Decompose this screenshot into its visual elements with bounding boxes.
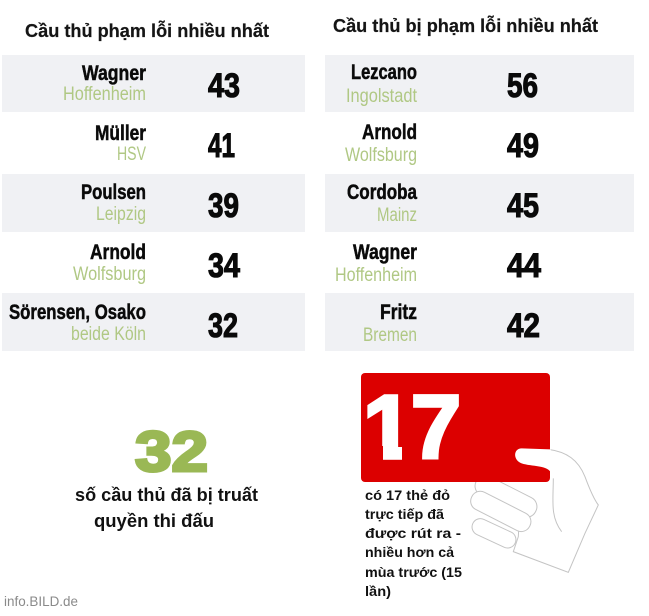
source credit: info.BILD.de bbox=[4, 593, 78, 609]
row: Wagner 43 bbox=[2, 55, 305, 112]
caption: suspended players bbox=[75, 485, 258, 531]
icon: hand holding red card bbox=[361, 373, 598, 572]
row: Wagner 43: Hoffenheim bbox=[63, 84, 146, 105]
row: Sörensen, Osako 32: beide Köln bbox=[71, 324, 146, 345]
caption: 17 red cards: nhiều hơn cả bbox=[365, 545, 455, 560]
row: Poulsen 39: 39 bbox=[208, 187, 239, 225]
heading: most fouls suffered: Cầu thủ bị phạm lỗi nhiều nhất bbox=[333, 15, 598, 36]
row: Wagner 44: Hoffenheim bbox=[335, 265, 417, 286]
row: Lezcano 56: Ingolstadt bbox=[346, 86, 418, 107]
caption: suspended players: quyền thi đấu bbox=[94, 511, 214, 531]
number 17 on card: 1 bbox=[363, 378, 413, 478]
caption: 17 red cards: lần) bbox=[365, 584, 391, 599]
caption: 17 red cards bbox=[365, 488, 463, 599]
row: Arnold 49: 49 bbox=[507, 127, 539, 165]
number 32: 32 bbox=[135, 420, 208, 484]
caption: 17 red cards: trực tiếp đã bbox=[365, 507, 445, 522]
row: Arnold 34: 34 bbox=[208, 247, 240, 285]
caption: 17 red cards: có 17 thẻ đỏ bbox=[365, 488, 450, 503]
caption: suspended players: số cầu thủ đã bị truất bbox=[75, 485, 258, 505]
row: Lezcano 56: Lezcano bbox=[351, 61, 417, 84]
row: Müller 41: 41 bbox=[208, 127, 235, 165]
caption: 17 red cards: mùa trước (15 bbox=[365, 565, 463, 580]
thumb bbox=[515, 448, 553, 473]
row: Arnold 49 bbox=[345, 121, 539, 166]
row: Fritz 42: 42 bbox=[507, 307, 540, 345]
row: Poulsen 39 bbox=[2, 174, 305, 232]
row: Müller 41: Müller bbox=[95, 122, 146, 145]
row: Lezcano 56 bbox=[325, 55, 634, 112]
hand palm outline bbox=[467, 449, 598, 572]
row: Arnold 34: Arnold bbox=[90, 241, 146, 264]
row: Müller 41: HSV bbox=[117, 144, 146, 165]
row: Cordoba 45: 45 bbox=[507, 187, 539, 225]
row: Wagner 43: 43 bbox=[208, 67, 240, 105]
row: Müller 41 bbox=[95, 122, 235, 165]
row: Arnold 34: Wolfsburg bbox=[73, 264, 146, 285]
red card bbox=[361, 373, 550, 482]
panel: fouls suffered table bbox=[325, 55, 634, 351]
row: Cordoba 45: Cordoba bbox=[347, 181, 417, 204]
row: Wagner 44: 44 bbox=[507, 247, 541, 285]
row: Lezcano 56: 56 bbox=[507, 67, 538, 105]
row: Wagner 43: Wagner bbox=[82, 62, 146, 85]
number 17 on card bbox=[362, 378, 461, 478]
row: Sörensen, Osako 32 bbox=[2, 293, 305, 351]
row: Fritz 42: Fritz bbox=[380, 301, 417, 324]
stat: 32 players suspended bbox=[75, 420, 258, 531]
row: Wagner 44 bbox=[335, 241, 541, 286]
caption: 17 red cards: được rút ra - bbox=[365, 526, 461, 541]
number 17 on card: 7 bbox=[411, 378, 461, 478]
row: Arnold 49: Arnold bbox=[362, 121, 417, 144]
row: Poulsen 39: Poulsen bbox=[81, 181, 146, 204]
panel: fouls committed table bbox=[2, 55, 305, 351]
row: Arnold 34 bbox=[73, 241, 240, 285]
row: Fritz 42: Bremen bbox=[363, 325, 417, 346]
heading: most fouls committed: Cầu thủ phạm lỗi nhiều nhất bbox=[25, 20, 269, 41]
row: Arnold 49: Wolfsburg bbox=[345, 145, 417, 166]
row: Cordoba 45: Mainz bbox=[377, 205, 417, 226]
row: Poulsen 39: Leipzig bbox=[96, 204, 146, 225]
row: Wagner 44: Wagner bbox=[353, 241, 417, 264]
row: Sörensen, Osako 32: Sörensen, Osako bbox=[9, 301, 146, 324]
row: Sörensen, Osako 32: 32 bbox=[208, 307, 238, 345]
row: Fritz 42 bbox=[325, 293, 634, 351]
row: Cordoba 45 bbox=[325, 174, 634, 232]
fingers bbox=[467, 472, 540, 551]
